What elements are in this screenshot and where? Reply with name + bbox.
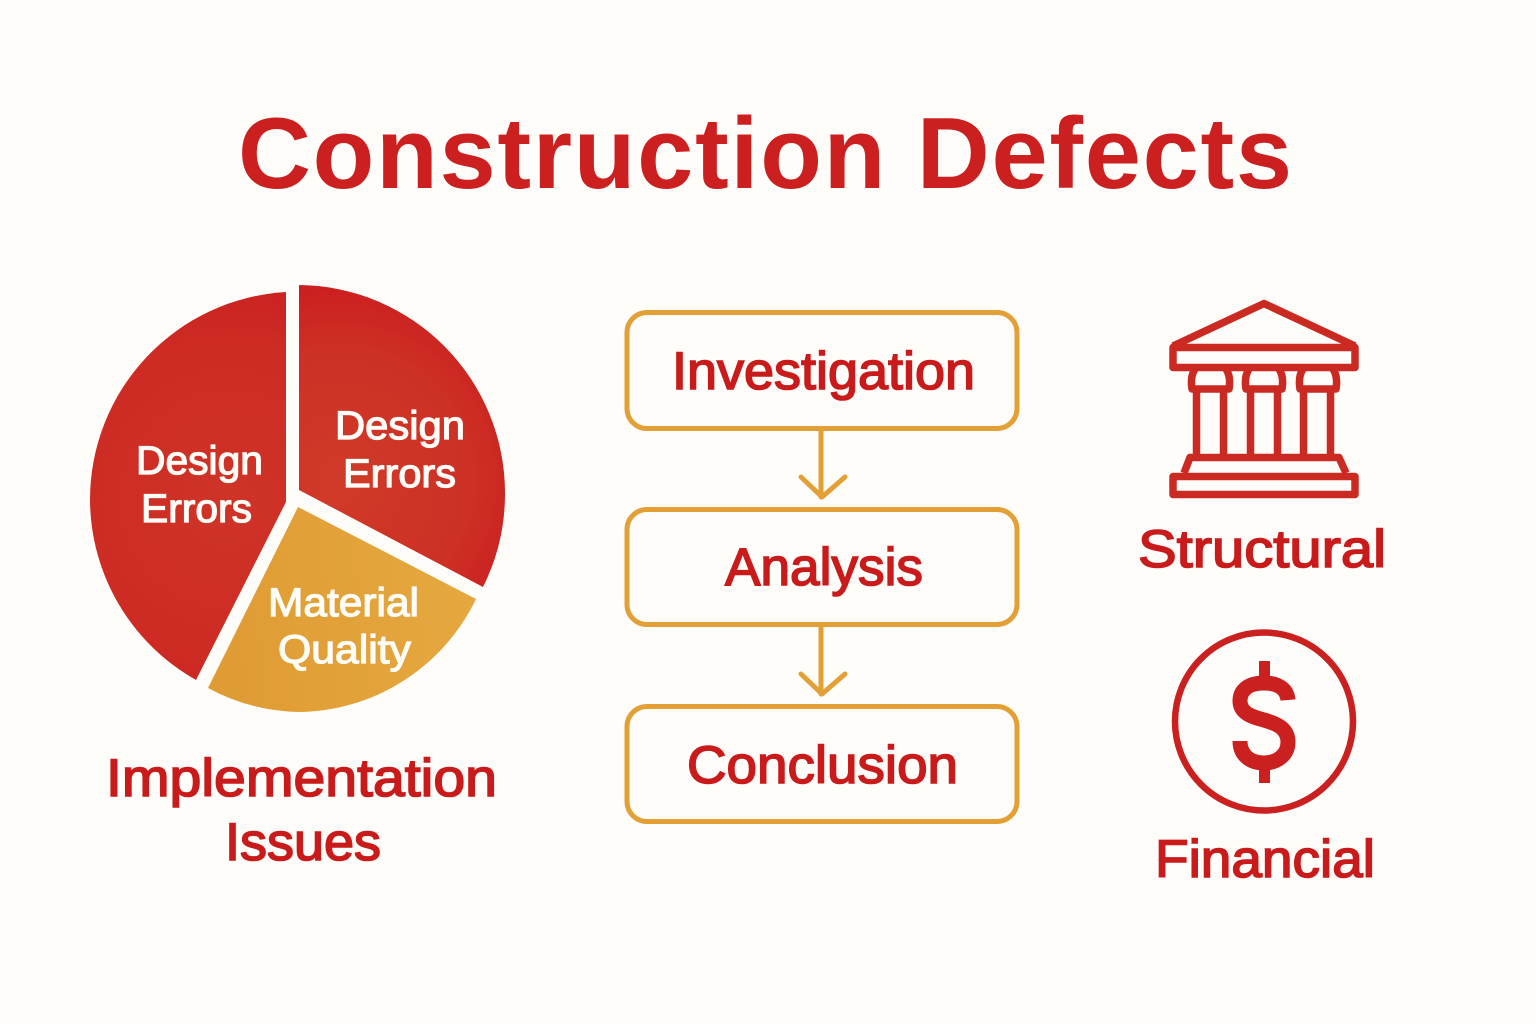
pie label: material quality: Material (268, 581, 419, 625)
icon: financial dollar (1175, 632, 1353, 810)
pie slice: material quality (208, 507, 476, 712)
pie label: material quality (268, 581, 419, 672)
flow box: investigation: Investigation (672, 342, 975, 401)
pie caption: Implementation (106, 749, 497, 808)
pie label: right design errors: Design (335, 404, 465, 448)
financial label: Financial (1155, 830, 1375, 889)
arrow: investigation to analysis (801, 430, 845, 497)
title: Construction Defects (238, 98, 1292, 210)
pie label: material quality: Quality (278, 628, 411, 672)
arrow: analysis to conclusion (801, 627, 845, 694)
pie caption (106, 749, 497, 872)
pie slice: right design errors (299, 285, 505, 587)
structural label: Structural (1138, 520, 1386, 579)
icon: structural building (1173, 304, 1355, 494)
flow box: conclusion (627, 706, 1017, 822)
flow box: investigation (627, 312, 1017, 428)
flow box: conclusion: Conclusion (687, 736, 958, 795)
pie label: right design errors: Errors (343, 452, 456, 496)
flow box: analysis: Analysis (725, 538, 923, 597)
pie label: left design errors (136, 439, 263, 531)
pie label: left design errors: Errors (141, 487, 252, 531)
pie label: right design errors (335, 404, 465, 496)
panel: process flow (627, 312, 1017, 822)
panel: pie chart (90, 285, 505, 712)
pie caption: Issues (225, 813, 381, 872)
pie slice: left design errors (90, 292, 286, 680)
pie label: left design errors: Design (136, 439, 263, 483)
flow box: analysis (627, 510, 1017, 624)
